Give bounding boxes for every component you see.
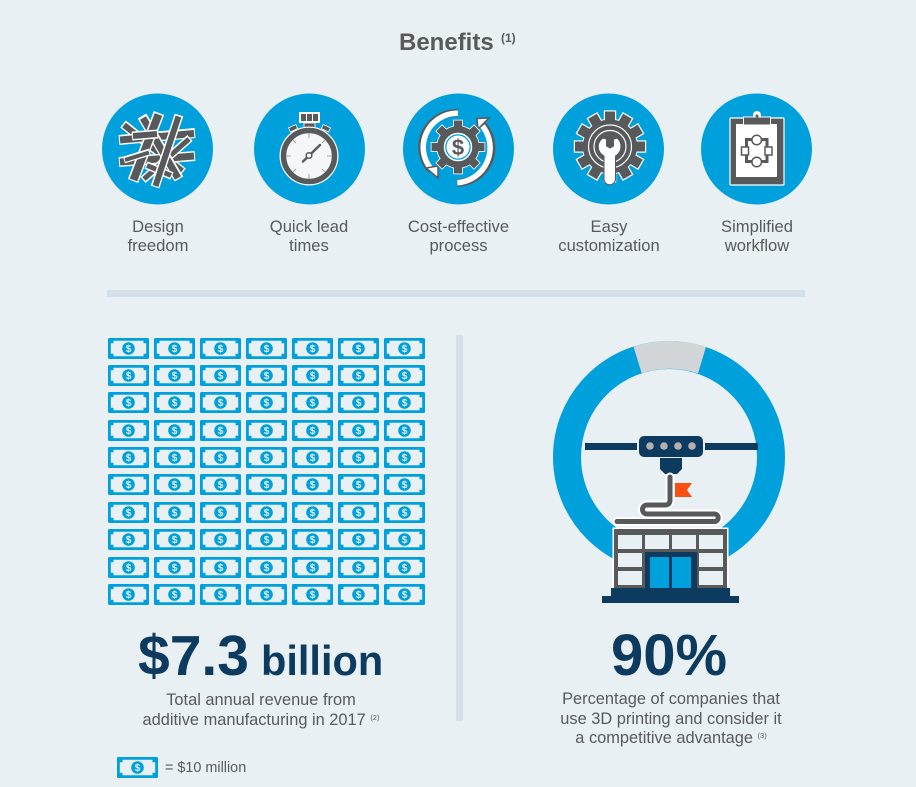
- chart: money bills pictogram: $$$$$$$: [126, 371, 408, 382]
- icon: stopwatch: [254, 94, 365, 204]
- legend: bill equals ten million: = $10 million: [165, 760, 246, 776]
- label: design freedom: Design: [132, 217, 184, 236]
- icon: cost gear: $: [452, 135, 464, 160]
- label: cost-effective process: Cost-effective: [408, 217, 509, 236]
- label: quick lead times: Quick lead: [270, 217, 348, 236]
- chart: money bills pictogram: $$$$$$$: [126, 480, 408, 491]
- label: simplified workflow: Simplified: [721, 217, 793, 236]
- label: simplified workflow: workflow: [724, 236, 790, 255]
- legend: bill equals ten million: [117, 757, 246, 778]
- text: 90 percent description: a competitive advantage: [575, 729, 767, 747]
- big number: revenue: $7.3: [138, 624, 249, 688]
- chart: money bills pictogram: $$$$$$$: [126, 563, 408, 574]
- chart: money bills pictogram: $$$$$$$: [126, 590, 408, 601]
- text: 90 percent description: use 3D printing and consider it: [560, 710, 782, 728]
- icon: design freedom: [102, 94, 213, 204]
- chart: money bills pictogram: [108, 338, 425, 605]
- big number: revenue: billion: [261, 637, 383, 684]
- icon: 3D printer and building: [585, 436, 758, 603]
- chart: money bills pictogram: $$$$$$$: [126, 344, 408, 355]
- text: revenue description: (2): [370, 713, 380, 722]
- label: cost-effective process: process: [429, 236, 488, 255]
- icon: cost gear: [403, 94, 514, 204]
- legend: bill equals ten million: $: [135, 763, 141, 774]
- label: easy customization: Easy: [591, 217, 627, 236]
- label: quick lead times: times: [289, 236, 329, 255]
- label: easy customization: customization: [558, 236, 660, 255]
- label: design freedom: freedom: [128, 236, 188, 255]
- text: 90 percent description: (3): [758, 731, 767, 740]
- text: revenue description: additive manufacturing in 2017: [143, 711, 380, 729]
- text: revenue description: Total annual revenue from: [166, 691, 356, 709]
- chart: money bills pictogram: $$$$$$$: [126, 426, 408, 437]
- title: Benefits: [399, 29, 494, 56]
- chart: money bills pictogram: $$$$$$$: [126, 398, 408, 409]
- chart: money bills pictogram: $$$$$$$: [126, 535, 408, 546]
- big number: 90 percent: 90%: [611, 623, 727, 688]
- chart: money bills pictogram: $$$$$$$: [126, 508, 408, 519]
- icon: customization gear and wrench: [553, 94, 664, 204]
- chart: money bills pictogram: $$$$$$$: [126, 453, 408, 464]
- title: (1): [501, 31, 516, 45]
- chart: 90 percent donut: [567, 341, 771, 559]
- text: 90 percent description: Percentage of companies that: [562, 690, 780, 708]
- icon: clipboard: [701, 94, 812, 204]
